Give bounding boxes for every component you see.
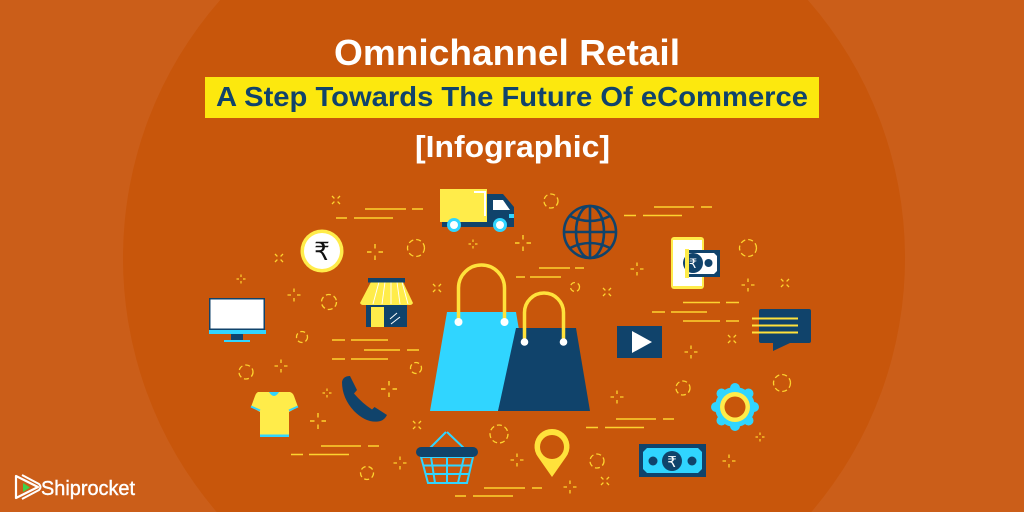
sparkles — [236, 196, 789, 494]
subtitle banner: A Step Towards The Future Of eCommerce — [216, 81, 808, 112]
icon: banknote — [639, 444, 706, 477]
icon: globe — [564, 206, 616, 258]
dashed speed lines — [291, 207, 739, 496]
icon: mobile payment: ₹ — [689, 256, 697, 271]
icon: location pin — [534, 429, 570, 477]
subtitle banner — [205, 77, 819, 118]
infographic label: [Infographic] — [415, 129, 610, 164]
icon: t-shirt — [251, 392, 298, 437]
icon: rupee coin: ₹ — [314, 238, 330, 266]
icon: mobile payment — [671, 237, 720, 289]
icon: shopping bags — [430, 265, 590, 411]
icon: banknote: ₹ — [667, 454, 677, 471]
logo: Shiprocket: Shiprocket — [41, 478, 135, 500]
icon: storefront — [360, 278, 413, 327]
icon: shopping basket — [416, 432, 478, 483]
icon: chat bubble — [752, 309, 811, 351]
icon: gear — [711, 383, 759, 431]
icon: telephone handset — [342, 376, 387, 422]
icon: delivery truck — [440, 189, 514, 232]
icon: desktop monitor — [209, 298, 266, 342]
icon: video player — [617, 326, 662, 358]
icon: rupee coin — [300, 230, 344, 272]
logo: Shiprocket — [16, 475, 135, 500]
background circle — [123, 0, 905, 512]
dashed circles — [239, 194, 790, 480]
title: Omnichannel Retail — [334, 32, 680, 73]
